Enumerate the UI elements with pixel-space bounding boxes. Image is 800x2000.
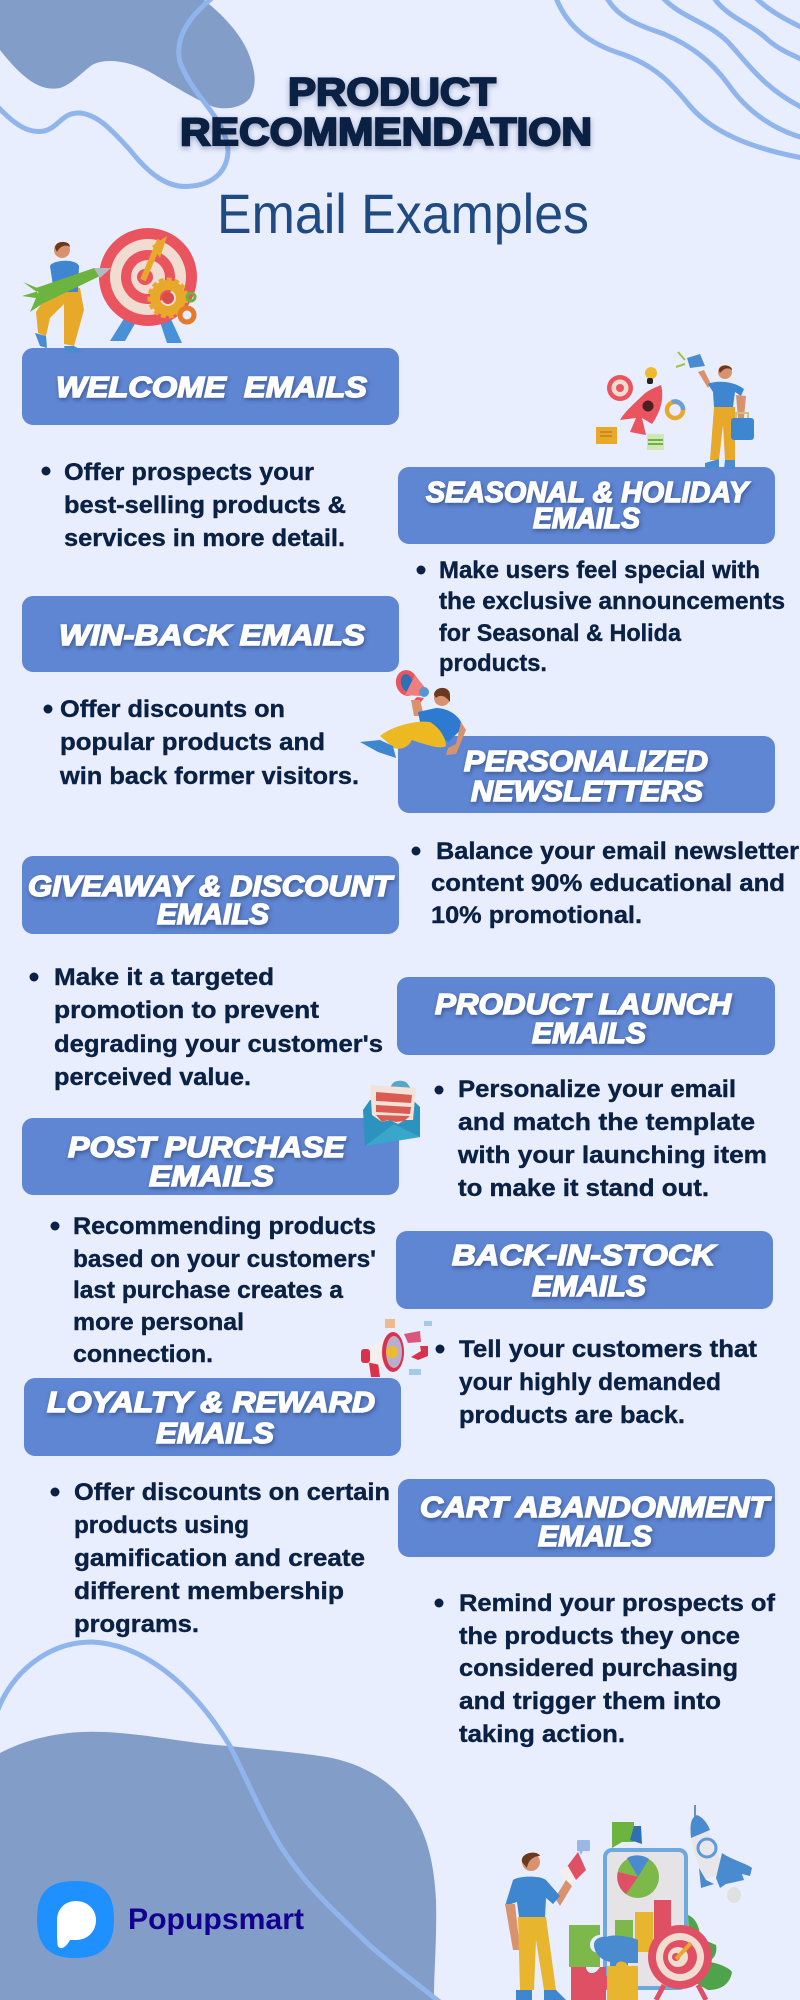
panel: loyalty and reward emails	[24, 1378, 401, 1638]
text: loyalty and reward emails	[50, 1479, 390, 1638]
text: back-in-stock emails: Tell your customers that	[459, 1336, 757, 1363]
panel: seasonal and holiday emails	[398, 467, 785, 677]
text: product launch emails: Personalize your email	[458, 1076, 736, 1103]
text: loyalty and reward emails: gamification and create	[74, 1545, 365, 1572]
text: post purchase emails: last purchase creates a	[73, 1277, 344, 1304]
text: back-in-stock emails: products are back.	[459, 1402, 685, 1429]
heading: product launch emails	[397, 977, 775, 1055]
heading: loyalty and reward emails: EMAILS	[156, 1418, 275, 1450]
blob: top left	[0, 0, 255, 108]
decorative lines: top right waves	[556, 0, 800, 158]
text: win-back emails: popular products and	[60, 729, 325, 756]
heading: back-in-stock emails: EMAILS	[532, 1271, 647, 1303]
text: loyalty and reward emails: different membership	[74, 1578, 344, 1605]
heading: personalized newsletters	[398, 736, 775, 813]
text: personalized newsletters: 10% promotional.	[431, 902, 642, 929]
decorative line: bottom curve	[0, 1642, 442, 2000]
icon: open envelope	[363, 1081, 420, 1146]
heading: seasonal and holiday emails: SEASONAL & HOLIDAY	[426, 477, 751, 509]
title: RECOMMENDATION	[180, 111, 592, 154]
brand name: Popupsmart	[128, 1903, 304, 1936]
panel: post purchase emails	[22, 1118, 399, 1368]
text: back-in-stock emails	[436, 1336, 757, 1429]
text: product launch emails	[434, 1076, 767, 1202]
heading: back-in-stock emails	[396, 1231, 773, 1309]
heading: loyalty and reward emails: LOYALTY & REWARD	[47, 1387, 375, 1419]
text: seasonal and holiday emails	[416, 557, 785, 677]
heading: cart abandonment emails: EMAILS	[538, 1521, 653, 1553]
panel: welcome emails	[22, 348, 399, 552]
panel: giveaway and discount emails	[22, 856, 399, 1091]
heading: product launch emails: EMAILS	[532, 1018, 647, 1050]
decorative line: top left curve	[0, 0, 228, 187]
text: cart abandonment emails: the products they once	[459, 1623, 740, 1650]
illustration: marketer with phone, puzzle and rocket	[505, 1805, 752, 2000]
panel: product launch emails	[397, 977, 775, 1202]
text: post purchase emails: connection.	[73, 1341, 213, 1368]
text: seasonal and holiday emails: for Seasonal & Holida	[439, 620, 682, 647]
icon: red megaphone with notifications	[361, 1319, 432, 1377]
text: cart abandonment emails: Remind your prospects of	[459, 1590, 776, 1617]
heading: post purchase emails: POST PURCHASE	[68, 1132, 347, 1164]
text: product launch emails: with your launching item	[457, 1142, 767, 1169]
heading: giveaway and discount emails: EMAILS	[157, 899, 270, 931]
text: loyalty and reward emails: Offer discounts on certain	[74, 1479, 390, 1506]
heading: welcome emails	[22, 348, 399, 425]
text: loyalty and reward emails: programs.	[74, 1611, 199, 1638]
text: cart abandonment emails	[434, 1590, 776, 1748]
text: win-back emails: win back former visitors.	[59, 763, 359, 790]
text: win-back emails: Offer discounts on	[60, 696, 285, 723]
icon: sitting man with megaphone	[360, 668, 466, 758]
text: back-in-stock emails: your highly demanded	[459, 1369, 721, 1396]
heading: post purchase emails: EMAILS	[149, 1161, 275, 1193]
text: seasonal and holiday emails: products.	[439, 650, 547, 677]
text: post purchase emails: based on your customers'	[73, 1246, 376, 1273]
panel: cart abandonment emails	[398, 1479, 776, 1748]
heading: win-back emails: WIN-BACK EMAILS	[59, 620, 366, 652]
title	[180, 71, 592, 154]
icon: man with megaphone and rocket	[596, 352, 754, 469]
text: personalized newsletters: Balance your email newsletter	[436, 838, 799, 865]
heading: win-back emails	[22, 596, 399, 672]
heading: loyalty and reward emails	[24, 1378, 401, 1456]
logo: Popupsmart	[37, 1881, 304, 1958]
text: post purchase emails: Recommending products	[73, 1213, 376, 1240]
text: welcome emails: services in more detail.	[64, 525, 345, 552]
panel: win-back emails	[22, 596, 399, 790]
text: giveaway and discount emails: promotion to prevent	[54, 997, 319, 1024]
text: giveaway and discount emails: Make it a targeted	[54, 964, 274, 991]
icon: man with dart and target	[22, 228, 197, 353]
heading: giveaway and discount emails	[22, 856, 399, 934]
text: personalized newsletters: content 90% educational and	[431, 870, 785, 897]
title: PRODUCT	[288, 71, 496, 114]
heading: welcome emails: WELCOME EMAILS	[56, 372, 368, 404]
subtitle: Email Examples	[217, 182, 589, 245]
text: seasonal and holiday emails: Make users feel special with	[439, 557, 760, 584]
heading: personalized newsletters: PERSONALIZED	[464, 746, 708, 778]
text: welcome emails: Offer prospects your	[64, 459, 314, 486]
heading: post purchase emails	[22, 1118, 399, 1195]
text: cart abandonment emails: and trigger them into	[459, 1688, 721, 1715]
heading: personalized newsletters: NEWSLETTERS	[471, 776, 704, 808]
text: cart abandonment emails: considered purchasing	[459, 1655, 738, 1682]
text: seasonal and holiday emails: the exclusive announcements	[439, 588, 785, 615]
text: welcome emails: best-selling products &	[64, 492, 346, 519]
heading: seasonal and holiday emails	[398, 467, 775, 544]
text: win-back emails	[44, 696, 359, 790]
icon: Popupsmart logo	[37, 1881, 114, 1958]
panel: personalized newsletters	[398, 736, 799, 929]
panel: back-in-stock emails	[396, 1231, 773, 1429]
heading: product launch emails: PRODUCT LAUNCH	[435, 989, 732, 1021]
text: giveaway and discount emails: degrading your customer's	[54, 1031, 383, 1058]
text: cart abandonment emails: taking action.	[459, 1721, 625, 1748]
text: welcome emails	[42, 459, 346, 552]
text: product launch emails: and match the template	[458, 1109, 755, 1136]
text: giveaway and discount emails: perceived value.	[54, 1064, 251, 1091]
text: post purchase emails: more personal	[73, 1309, 244, 1336]
text: product launch emails: to make it stand out.	[458, 1175, 709, 1202]
text: personalized newsletters	[412, 838, 799, 929]
heading: back-in-stock emails: BACK-IN-STOCK	[452, 1240, 717, 1272]
text: giveaway and discount emails	[30, 964, 383, 1091]
text: loyalty and reward emails: products using	[74, 1512, 249, 1539]
blob: bottom left	[0, 1732, 436, 2000]
heading: cart abandonment emails: CART ABANDONMENT	[420, 1492, 772, 1524]
heading: cart abandonment emails	[398, 1479, 775, 1557]
heading: seasonal and holiday emails: EMAILS	[533, 503, 641, 535]
text: post purchase emails	[50, 1213, 376, 1368]
heading: giveaway and discount emails: GIVEAWAY & DISCOUNT	[28, 871, 394, 903]
